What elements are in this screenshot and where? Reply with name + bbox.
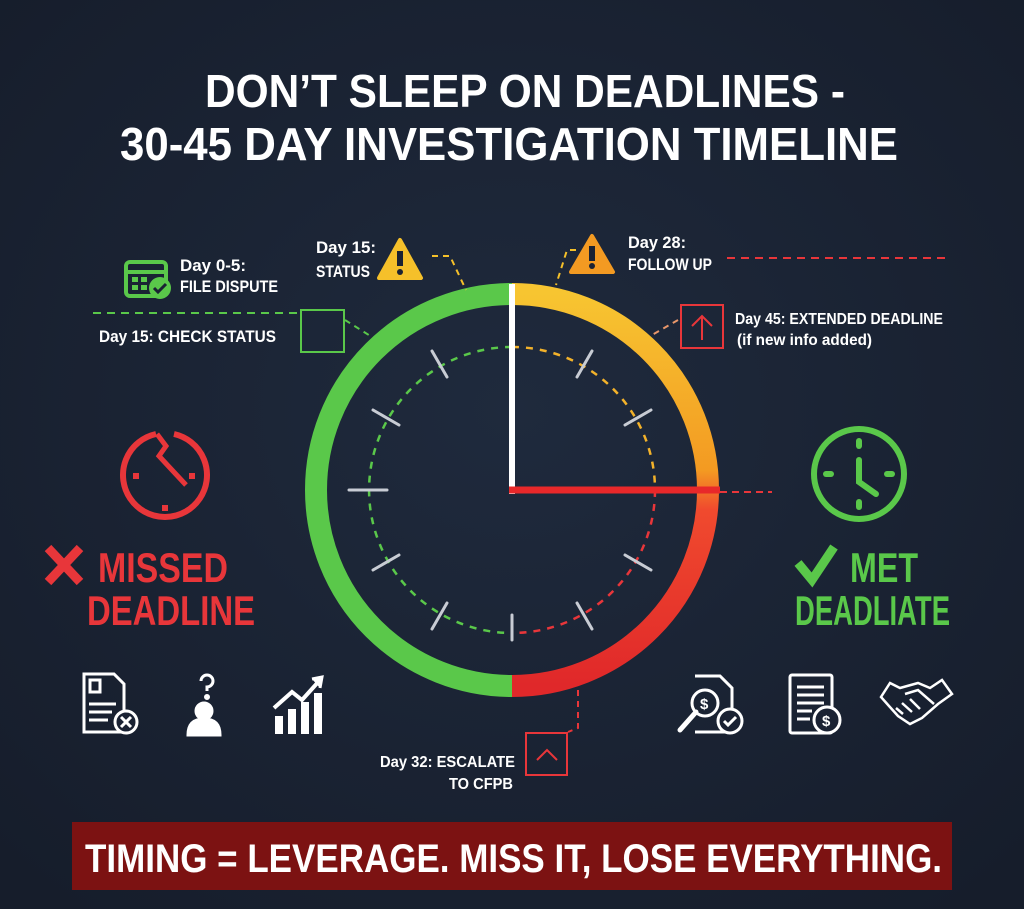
annotation: day 45: Day 45: EXTENDED DEADLINE [735,311,943,328]
annotation: day 0-5: FILE DISPUTE [180,277,278,296]
annotation: day 15 status [316,238,466,290]
missed deadline: DEADLINE [87,587,255,634]
icons: left row [84,674,322,735]
met deadline: MET [850,544,918,591]
missed deadline: MISSED [98,544,228,591]
title: DON’T SLEEP ON DEADLINES - [205,65,845,117]
clock [316,284,720,686]
annotation: day 28: Day 28: [628,233,686,252]
annotation: day 0-5: Day 0-5: [180,256,246,275]
icons: right row: $ [822,713,831,730]
title [120,65,898,170]
annotation: day 45: (if new info added) [737,332,872,349]
annotation: day 15 status: STATUS [316,262,370,281]
icons: right row [680,675,952,733]
icon: met clock [814,429,904,519]
icons: right row: $ [700,696,709,713]
annotation: day 32: Day 32: ESCALATE [380,754,515,771]
title: 30-45 DAY INVESTIGATION TIMELINE [120,118,898,170]
annotation: day 32 [380,690,578,793]
missed deadline [48,544,255,634]
annotation: day 15 check status [93,310,372,352]
met deadline [795,544,950,634]
annotation: day 45 [652,305,943,349]
annotation: day 28 [556,233,948,285]
bottom banner [72,822,952,890]
annotation: day 0-5 [126,256,278,299]
annotation: day 15 check status: Day 15: CHECK STATUS [99,327,276,346]
annotation: day 32: TO CFPB [449,776,513,793]
annotation: day 28: FOLLOW UP [628,255,712,274]
annotation: day 15 status: Day 15: [316,238,376,257]
icon: broken clock [123,434,207,517]
